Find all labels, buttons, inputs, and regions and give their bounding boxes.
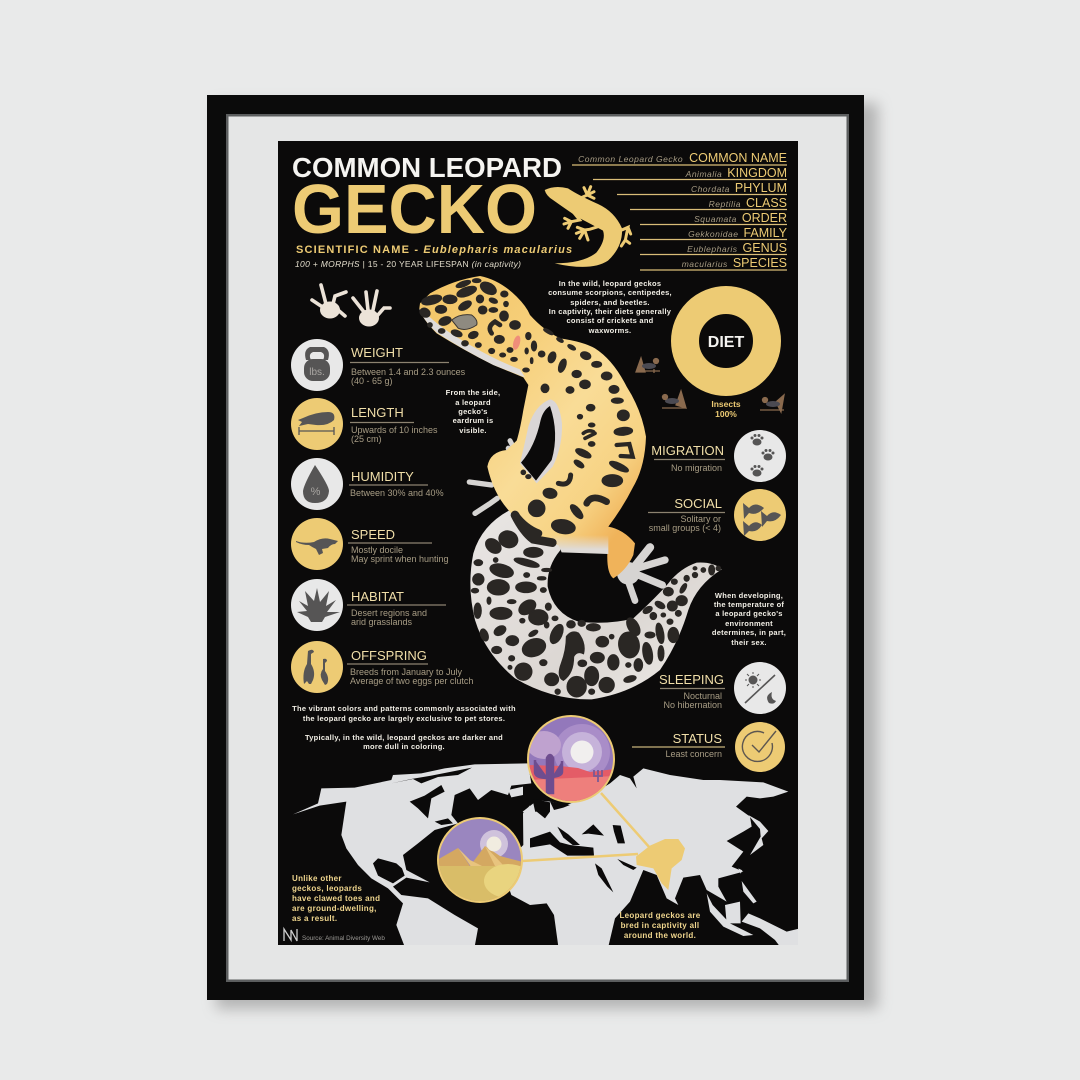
- taxonomy table: Squamata ORDER: [694, 211, 787, 225]
- diet donut chart: Insects: [711, 399, 741, 409]
- stat: length: (25 cm): [351, 434, 382, 444]
- stat: habitat: HABITAT: [351, 589, 404, 604]
- Americas and Greenland: [293, 763, 531, 947]
- callout: wild diet: In captivity, their diets generally: [549, 307, 672, 316]
- callout: temperature: determines, in part,: [712, 628, 786, 637]
- callout: claws: are ground-dwelling,: [292, 904, 377, 913]
- callout: wild diet: consume scorpions, centipedes,: [548, 288, 672, 297]
- callout: temperature: a leopard gecko's: [715, 609, 783, 618]
- callout: colors: more dull in coloring.: [363, 742, 445, 751]
- callout: eardrum: visible.: [459, 426, 487, 435]
- stat: speed: [291, 518, 449, 570]
- icons: crickets: [636, 358, 784, 412]
- stat: habitat: arid grasslands: [351, 617, 413, 627]
- taxonomy table: Eublepharis GENUS: [687, 241, 787, 255]
- callout: wild diet: spiders, and beetles.: [570, 298, 650, 307]
- Eurasia, Africa, islands: [503, 768, 800, 947]
- stat: weight: [291, 339, 466, 391]
- callout: claws: Unlike other: [292, 874, 342, 883]
- callout: wild diet: waxworms.: [588, 326, 631, 335]
- tail stripe: [515, 515, 552, 543]
- title: COMMON LEOPARD: [292, 152, 562, 183]
- stat: social: SOCIAL: [674, 496, 722, 511]
- taxonomy table: Common Leopard Gecko COMMON NAME: [578, 151, 787, 165]
- callout: eardrum: eardrum is: [453, 416, 493, 425]
- stat: humidity: [291, 458, 444, 510]
- callout: claws: have clawed toes and: [292, 894, 380, 903]
- callout: colors: Typically, in the wild, leopard geckos are darker and: [305, 733, 503, 742]
- icon: gecko hands: [312, 285, 390, 326]
- callout: claws: as a result.: [292, 914, 337, 923]
- callout: captivity: bred in captivity all: [621, 921, 699, 930]
- stat: humidity: Between 30% and 40%: [350, 488, 444, 498]
- stat: weight: (40 - 65 g): [351, 376, 393, 386]
- stat: length: [291, 398, 438, 450]
- title: GECKO: [292, 170, 537, 248]
- stat: status: Least concern: [665, 749, 722, 759]
- callout: temperature: environment: [725, 619, 773, 628]
- tail spots: [472, 529, 720, 697]
- logo: [284, 929, 297, 941]
- stat: sleeping: [659, 662, 786, 714]
- taxonomy table: [572, 151, 788, 270]
- scientific name: SCIENTIFIC NAME - Eublepharis macularius: [296, 244, 573, 256]
- diet donut chart: [685, 300, 767, 419]
- source: Source: Animal Diversity Web: [302, 935, 385, 942]
- stat: migration: MIGRATION: [651, 443, 724, 458]
- stat: humidity: HUMIDITY: [351, 469, 414, 484]
- callout: temperature: When developing,: [715, 591, 783, 600]
- stat: weight: Between 1.4 and 2.3 ounces: [351, 367, 466, 377]
- morphs and lifespan: 100 + MORPHS | 15 - 20 YEAR LIFESPAN (in captivity): [295, 259, 521, 269]
- stat: status: [632, 722, 785, 772]
- taxonomy table: Reptilia CLASS: [709, 196, 787, 210]
- front toes and arm: [469, 441, 525, 513]
- stat: humidity: %: [311, 486, 321, 498]
- throat white: [419, 308, 525, 377]
- callout: wild diet: consist of crickets and: [566, 316, 654, 325]
- stat: offspring: OFFSPRING: [351, 648, 427, 663]
- stat: migration: No migration: [671, 463, 722, 473]
- callout: colors: the leopard gecko are largely exclusive to pet stores.: [303, 714, 505, 723]
- world map: [293, 763, 800, 947]
- stat: offspring: Average of two eggs per clutch: [350, 676, 473, 686]
- taxonomy table: macularius SPECIES: [682, 256, 787, 270]
- ear: [512, 335, 522, 351]
- poster panel: [278, 141, 798, 945]
- stat: length: LENGTH: [351, 405, 404, 420]
- eye: [452, 315, 477, 329]
- stat: habitat: Desert regions and: [351, 608, 427, 618]
- black picture frame: [207, 95, 864, 1000]
- stat: social: Solitary or: [680, 514, 721, 524]
- desert scene: cactus: [527, 715, 615, 803]
- stat: status: STATUS: [673, 731, 722, 746]
- stat: weight: lbs.: [309, 367, 325, 378]
- body spots: [419, 279, 633, 535]
- icon: gold gecko silhouette: [545, 187, 631, 267]
- stat: sleeping: SLEEPING: [659, 672, 724, 687]
- connector lines: [522, 793, 650, 861]
- stat: length: Upwards of 10 inches: [351, 425, 438, 435]
- stat: sleeping: No hibernation: [663, 700, 722, 710]
- stat: offspring: [291, 641, 473, 693]
- callout: temperature: the temperature of: [714, 600, 784, 609]
- taxonomy table: Chordata PHYLUM: [691, 181, 787, 195]
- stat: offspring: Breeds from January to July: [350, 667, 463, 677]
- gecko illustration: [419, 276, 722, 699]
- stat: habitat: [291, 579, 446, 631]
- body: [419, 276, 646, 578]
- callout: eardrum: a leopard: [455, 398, 491, 407]
- diet donut chart: 100%: [715, 409, 737, 419]
- callout: wild diet: In the wild, leopard geckos: [559, 279, 661, 288]
- stat: social: small groups (< 4): [649, 523, 721, 533]
- stat: speed: May sprint when hunting: [351, 554, 449, 564]
- stat: speed: Mostly docile: [351, 545, 403, 555]
- gold India range: [636, 839, 685, 890]
- stat: sleeping: Nocturnal: [683, 691, 722, 701]
- stat: weight: WEIGHT: [351, 345, 403, 360]
- callout: captivity: Leopard geckos are: [620, 911, 701, 920]
- taxonomy table: Animalia KINGDOM: [685, 166, 787, 180]
- callout: captivity: around the world.: [624, 931, 696, 940]
- diet donut chart: DIET: [708, 334, 744, 351]
- stat: social: [648, 489, 786, 541]
- desert scene: dunes: [437, 817, 532, 903]
- belly rim and hole: [520, 399, 562, 483]
- callout: claws: geckos, leopards: [292, 884, 362, 893]
- taxonomy table: Gekkonidae FAMILY: [688, 226, 788, 240]
- tail: [470, 510, 722, 699]
- callout: eardrum: From the side,: [446, 388, 500, 397]
- stat: migration: [651, 430, 786, 482]
- stat: speed: SPEED: [351, 527, 395, 542]
- rear foot: [617, 547, 665, 601]
- tail fade: [550, 535, 608, 554]
- callout: eardrum: gecko's: [458, 407, 488, 416]
- callout: colors: The vibrant colors and patterns commonly associated with: [292, 704, 516, 713]
- callout: temperature: their sex.: [731, 638, 767, 647]
- frame shadow: [216, 103, 878, 1009]
